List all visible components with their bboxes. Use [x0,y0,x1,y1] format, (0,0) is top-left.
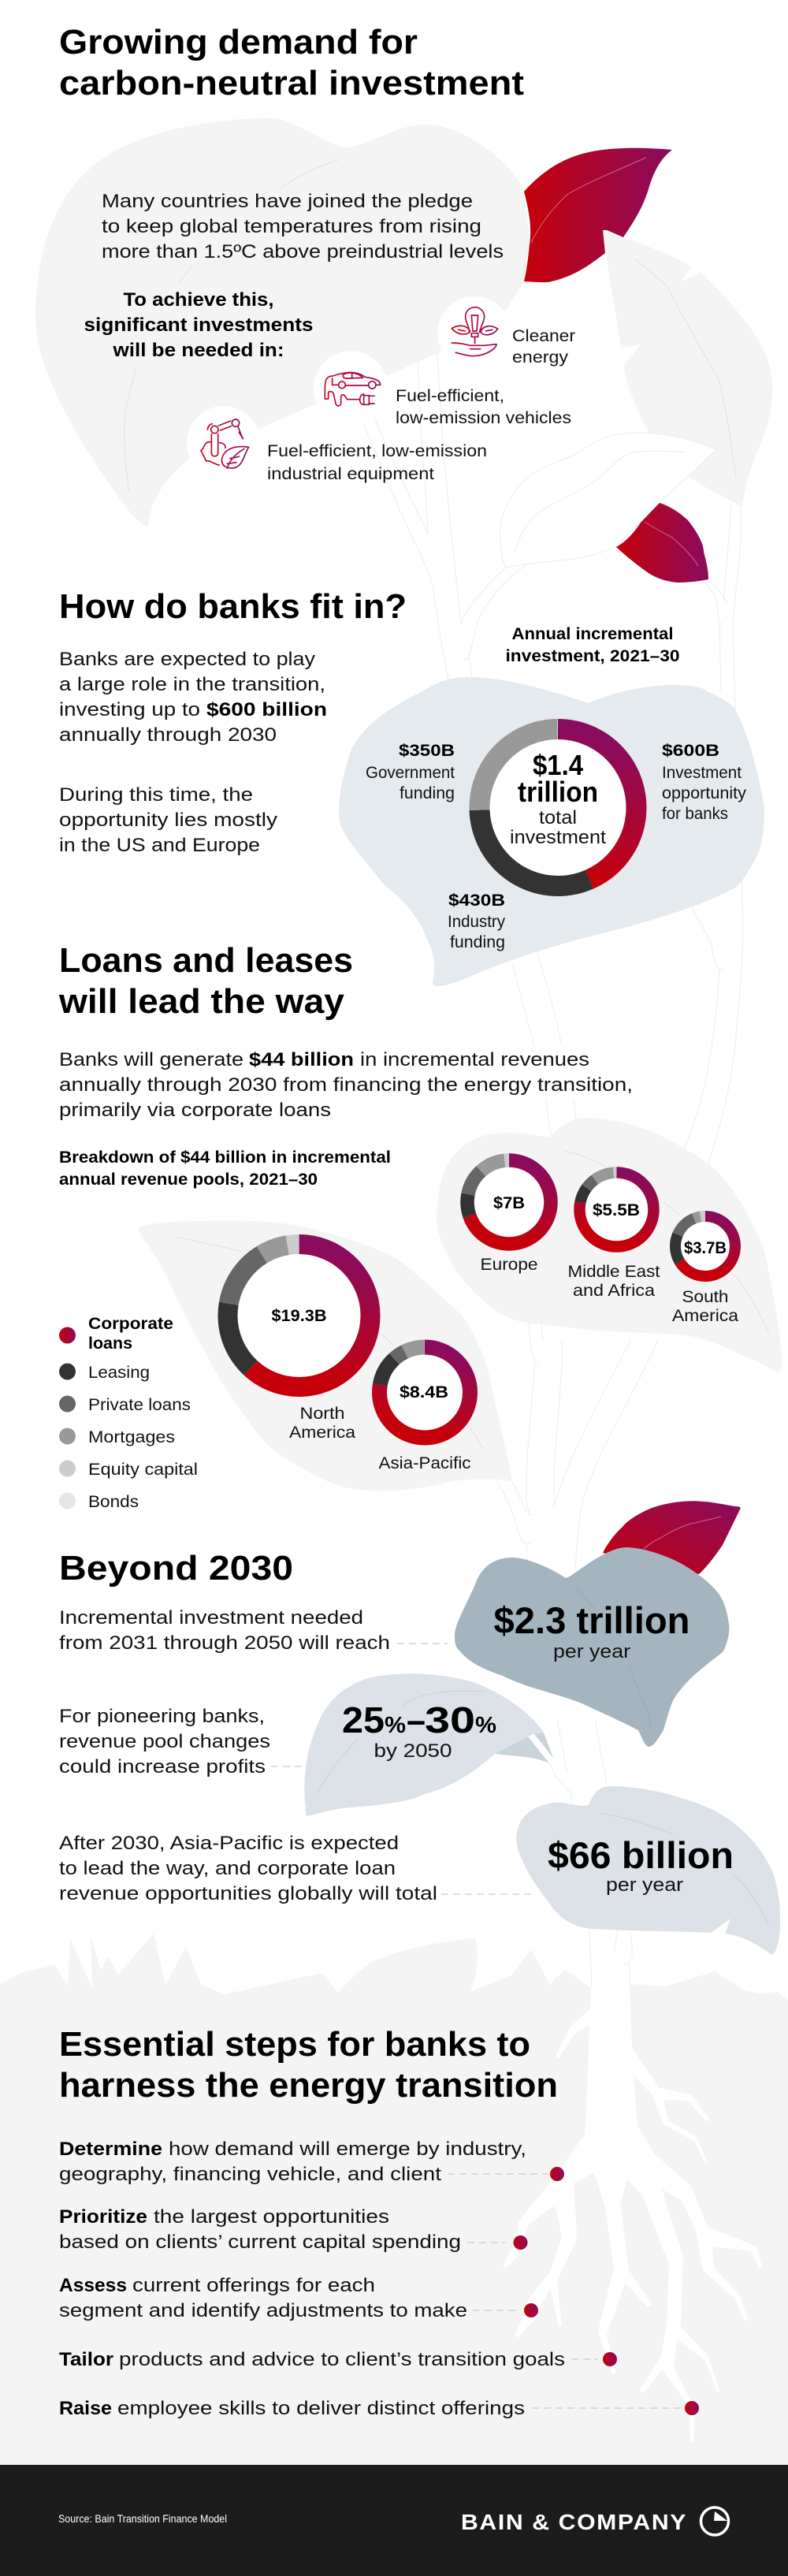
panel: upper-right grey leaf [437,1118,782,1372]
label: government funding: $350B [399,742,455,760]
heading: to achieve this: significant investments [84,315,314,336]
text block: investment 2031-2050 [59,1607,448,1654]
heading: essential steps: Essential steps for banks to [59,2025,530,2064]
donut chart: Europe: $7B [493,1194,525,1212]
donut chart: North America: $19.3B [271,1307,326,1325]
title: carbon-neutral investment [59,64,524,102]
donut chart: South America: $3.7B [684,1239,727,1257]
step 4: tailor [59,2349,617,2370]
legend: Mortgages [88,1428,175,1446]
panel: light leaf 66 billion: per year [606,1874,683,1896]
step 3: assess: current offerings for each [132,2275,375,2296]
step 5: raise: Raise [59,2398,112,2419]
text block: banks role [59,649,327,746]
chart heading: breakdown: Breakdown of $44 billion in incremental [59,1148,391,1167]
label: industry funding: Industry [448,913,505,931]
step 5: raise [59,2398,699,2419]
icon: industrial equipment [187,406,261,480]
panel: light leaf 25-30 percent: 25 [342,1699,385,1740]
text block: after 2030 [59,1833,533,1904]
step 2: prioritize: based on clients’ current capital spending [59,2232,461,2253]
step 3: assess [59,2275,538,2321]
donut chart: North America [228,1244,370,1442]
text block: pioneering banks [59,1706,302,1778]
panel: light leaf 66 billion [516,1786,780,1955]
donut chart: Middle East and Africa: Middle East [567,1263,660,1281]
heading: essential steps [59,2025,558,2105]
label: government funding: Government [366,764,455,782]
donut chart: North America: North [299,1405,345,1423]
title: Growing demand for [59,23,418,61]
panel: light leaf 66 billion: $66 billion [548,1834,734,1876]
logo: Bain & Company: BAIN & COMPANY [461,2510,687,2534]
donut chart: total investment: total [539,807,577,828]
label: investment opportunity for banks: Investment [662,764,742,782]
illustration: roots [503,1984,762,2444]
label: government funding: funding [400,784,455,802]
donut chart: Middle East and Africa [567,1173,660,1300]
panel: steel leaf 2.3 trillion: $2.3 trillion [493,1599,690,1641]
text block: banks role: annually through 2030 [59,724,277,746]
intro text block: Many countries have joined the pledge [102,191,473,212]
label: cleaner energy [512,327,575,367]
label: industrial equipment: industrial equipment [267,465,434,483]
panel: ground [0,1934,788,2467]
label: industrial equipment: Fuel-efficient, low-emission [267,442,487,460]
logo: Bain & Company [461,2507,728,2535]
donut chart: total investment [479,729,637,886]
text block: opportunity geography: in the US and Europe [59,835,260,856]
text block: opportunity geography: opportunity lies mostly [59,810,277,831]
donut chart: Asia-Pacific: $8.4B [400,1383,448,1402]
heading: to achieve this: will be needed in: [112,340,284,361]
chart heading: annual incremental investment: Annual incremental [512,625,673,643]
legend: Leasing [88,1364,150,1382]
heading: to achieve this: To achieve this, [123,289,274,311]
intro text block: to keep global temperatures from rising [102,216,481,237]
step 2: prioritize [59,2206,528,2253]
heading: loans and leases: will lead the way [58,982,345,1021]
panel: lower-left grey leaf [139,1221,512,1491]
panel: large grey leaf behind intro [35,118,530,526]
step 1: determine: geography, financing vehicle, and client [59,2164,441,2185]
heading: how do banks fit in: How do banks fit in? [59,587,407,626]
panel: light leaf 25-30 percent: – [407,1699,426,1740]
text block: opportunity geography: During this time, the [59,784,253,806]
donut chart: Europe [467,1160,551,1274]
icon: red leaf top [524,148,672,282]
label: fuel-efficient vehicles [396,387,571,427]
text block: investment 2031-2050: Incremental investment needed [59,1607,363,1629]
step 3: assess: segment and identify adjustments to make [59,2300,467,2321]
donut chart: Middle East and Africa: and Africa [573,1282,655,1300]
text block: incremental revenues: annually through 2030 from financing the energy transition, [59,1074,633,1096]
heading: to achieve this [84,289,314,361]
text block: incremental revenues: primarily via corporate loans [59,1100,331,1121]
label: industry funding [448,892,505,951]
donut chart: South America [672,1216,738,1325]
text block: incremental revenues: in incremental revenues [360,1049,589,1070]
icon: red leaf beyond 2030 [603,1501,741,1574]
step 4: tailor: products and advice to client’s transition goals [119,2349,565,2370]
text block: incremental revenues: $44 billion [249,1049,354,1070]
icon: electric vehicle [314,351,388,425]
step 2: prioritize: the largest opportunities [154,2206,389,2228]
label: fuel-efficient vehicles: low-emission vehicles [396,409,571,427]
panel: blue-grey leaf behind donut [339,677,764,986]
chart heading: breakdown [59,1148,391,1189]
step 1: determine: how demand will emerge by industry, [169,2139,526,2160]
text block: after 2030: to lead the way, and corporate loan [59,1858,396,1879]
legend: Corporate [88,1315,173,1333]
label: investment opportunity for banks: $600B [662,742,719,760]
label: industry funding: $430B [448,892,505,910]
plant stem lines [364,353,743,1988]
text block: banks role: Banks are expected to play [59,649,315,670]
step 1: determine: Determine [59,2139,162,2160]
label: investment opportunity for banks: for banks [662,805,728,823]
heading: loans and leases [58,941,353,1021]
text block: pioneering banks: could increase profits [59,1756,266,1778]
legend [59,1315,198,1511]
step 1: determine [59,2139,564,2185]
label: cleaner energy: energy [512,348,569,367]
text block: opportunity geography [59,784,277,856]
label: investment opportunity for banks: opportunity [662,784,747,802]
donut chart: total investment: investment [510,827,606,848]
label: investment opportunity for banks [662,742,747,823]
icon: cleaner energy [437,296,511,370]
chart heading: annual incremental investment: investment, 2021–30 [506,647,679,665]
chart heading: annual incremental investment [506,625,679,665]
legend: loans [88,1335,132,1353]
donut chart: Middle East and Africa: $5.5B [593,1201,640,1219]
chart heading: breakdown: annual revenue pools, 2021–30 [59,1171,318,1189]
intro text block [102,191,504,262]
step 2: prioritize: Prioritize [59,2206,147,2228]
step 4: tailor: Tailor [59,2349,113,2370]
panel: light leaf 25-30 percent [304,1673,553,1816]
intro text block: more than 1.5ºC above preindustrial levels [102,241,504,262]
footer band [0,2465,788,2576]
text block: banks role: investing up to [59,699,200,720]
label: fuel-efficient vehicles: Fuel-efficient, [396,387,504,405]
donut chart: Europe: Europe [481,1256,537,1274]
step 3: assess: Assess [59,2275,127,2296]
panel: steel leaf 2.3 trillion: per year [553,1641,630,1662]
label: industry funding: funding [450,933,505,951]
label: industrial equipment [267,442,487,483]
text block: banks role: a large role in the transition, [59,674,325,695]
text block: after 2030: After 2030, Asia-Pacific is expected [59,1833,399,1854]
source note: Source: Bain Transition Finance Model [58,2512,227,2525]
legend: Equity capital [88,1461,198,1479]
panel: light leaf 25-30 percent: % [385,1713,406,1738]
text block: incremental revenues: Banks will generate [59,1049,243,1070]
text block: incremental revenues [59,1049,633,1121]
donut chart: total investment: $1.4 [533,749,583,781]
icon: red leaf middle [616,503,708,583]
heading: loans and leases: Loans and leases [59,941,353,980]
donut chart: total investment: trillion [518,776,598,808]
text block: banks role: $600 billion [206,699,327,720]
panel: light leaf 25-30 percent: 30 [425,1699,475,1740]
legend: Private loans [88,1396,191,1414]
decoration: outlined white leaf [500,433,716,568]
panel: light leaf 25-30 percent: by 2050 [374,1740,452,1762]
panel: light leaf 25-30 percent: % [475,1713,496,1738]
legend: Bonds [88,1493,139,1511]
label: government funding [366,742,455,802]
text block: investment 2031-2050: from 2031 through 2050 will reach [59,1632,390,1654]
text block: pioneering banks: For pioneering banks, [59,1706,265,1727]
label: cleaner energy: Cleaner [512,327,575,345]
donut chart: South America: America [672,1307,738,1325]
heading: beyond 2030: Beyond 2030 [59,1549,293,1588]
heading: essential steps: harness the energy transition [59,2066,558,2105]
donut chart: Asia-Pacific [378,1347,471,1472]
donut chart: Asia-Pacific: Asia-Pacific [378,1454,471,1472]
panel: steel leaf 2.3 trillion [455,1547,729,1747]
title [59,23,524,102]
text block: pioneering banks: revenue pool changes [59,1731,270,1752]
text block: after 2030: revenue opportunities globally will total [59,1883,437,1904]
step 5: raise: employee skills to deliver distinct offerings [117,2398,525,2419]
donut chart: North America: America [289,1424,355,1442]
decoration: grey leaf right [603,230,772,507]
donut chart: South America: South [682,1288,728,1306]
